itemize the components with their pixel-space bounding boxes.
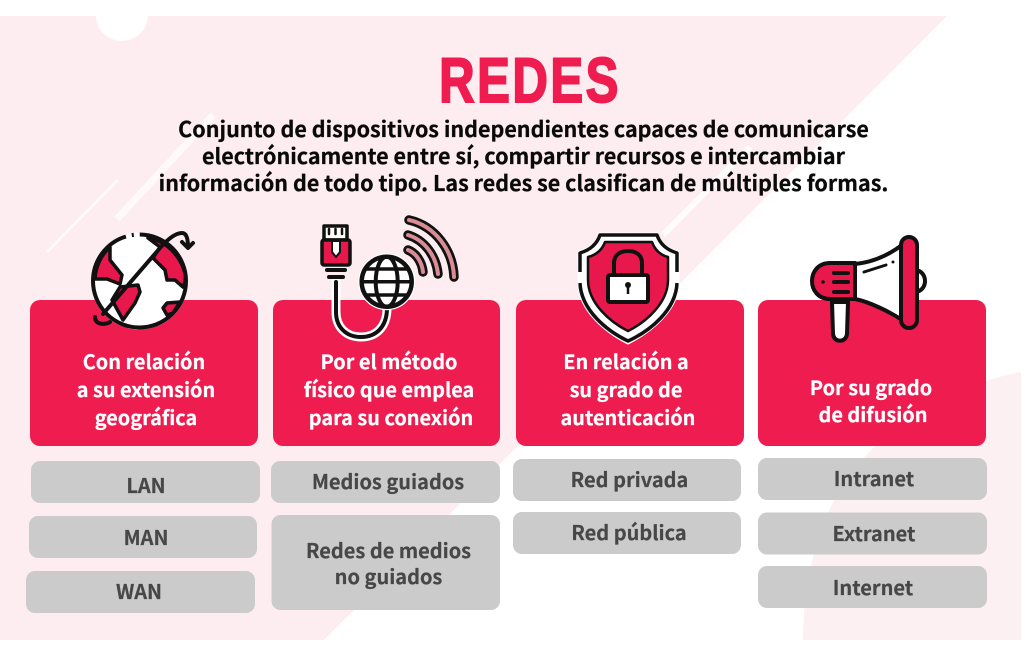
- item: Red privada: [513, 459, 741, 501]
- card 4 label: Por su grado: [810, 372, 932, 401]
- card 2 label: [304, 346, 474, 431]
- card 2 label: para su conexión: [309, 402, 473, 431]
- card 4 label: de difusión: [819, 399, 927, 428]
- panel: red card 3: [516, 300, 744, 446]
- panel: red card 1: [30, 300, 258, 446]
- panel: red card 4: [758, 300, 986, 446]
- panel: red card 2: [273, 300, 500, 446]
- card 3 label: autenticación: [561, 402, 695, 431]
- icon: megaphone: [812, 237, 925, 341]
- item: MAN: MAN: [124, 522, 168, 551]
- icon: globe: [91, 232, 193, 330]
- item: Internet: [758, 566, 987, 608]
- item: Redes de medios no guiados: [272, 515, 500, 610]
- item: WAN: [26, 571, 255, 613]
- item: WAN: WAN: [116, 576, 162, 605]
- background: pink blob bottom right: [803, 372, 1021, 640]
- item: Extranet: Extranet: [833, 518, 916, 547]
- item: Redes de medios no guiados: no guiados: [335, 561, 442, 590]
- card 3 label: [561, 346, 695, 431]
- icon: shield with padlock: [579, 234, 678, 343]
- card 3 label: En relación a: [563, 346, 689, 375]
- item: Red privada: Red privada: [571, 464, 688, 493]
- icon: network cable, globe and wifi: [322, 220, 454, 337]
- intro text: electrónicamente entre sí, compartir recursos e intercambiar: [202, 140, 846, 171]
- card 4 label: [810, 372, 932, 428]
- title: REDES: [439, 45, 621, 115]
- item: Redes de medios no guiados: Redes de medios: [306, 535, 471, 564]
- card 1 label: a su extensión: [77, 374, 215, 403]
- card 2 label: Por el método: [321, 346, 457, 375]
- intro text: información de todo tipo. Las redes se clasifican de múltiples formas.: [159, 167, 888, 198]
- item: LAN: LAN: [126, 470, 166, 499]
- card 1 label: Con relación: [83, 346, 205, 375]
- item: Internet: Internet: [833, 572, 914, 601]
- item: Red pública: Red pública: [571, 517, 687, 546]
- item: Medios guiados: Medios guiados: [312, 466, 464, 495]
- intro text: Conjunto de dispositivos independientes capaces de comunicarse: [178, 113, 869, 144]
- card 1 label: [77, 346, 215, 431]
- item: Red pública: [513, 512, 741, 554]
- card 3 label: su grado de: [570, 374, 682, 403]
- item: Intranet: Intranet: [834, 463, 915, 492]
- intro text: [159, 113, 888, 198]
- item: LAN: [31, 461, 260, 503]
- card 2 label: físico que emplea: [304, 374, 474, 403]
- item: Intranet: [758, 458, 987, 500]
- card 1 label: geográfica: [95, 402, 197, 431]
- item: Medios guiados: [271, 461, 500, 503]
- item: Extranet: [758, 512, 987, 554]
- item: MAN: [29, 516, 257, 558]
